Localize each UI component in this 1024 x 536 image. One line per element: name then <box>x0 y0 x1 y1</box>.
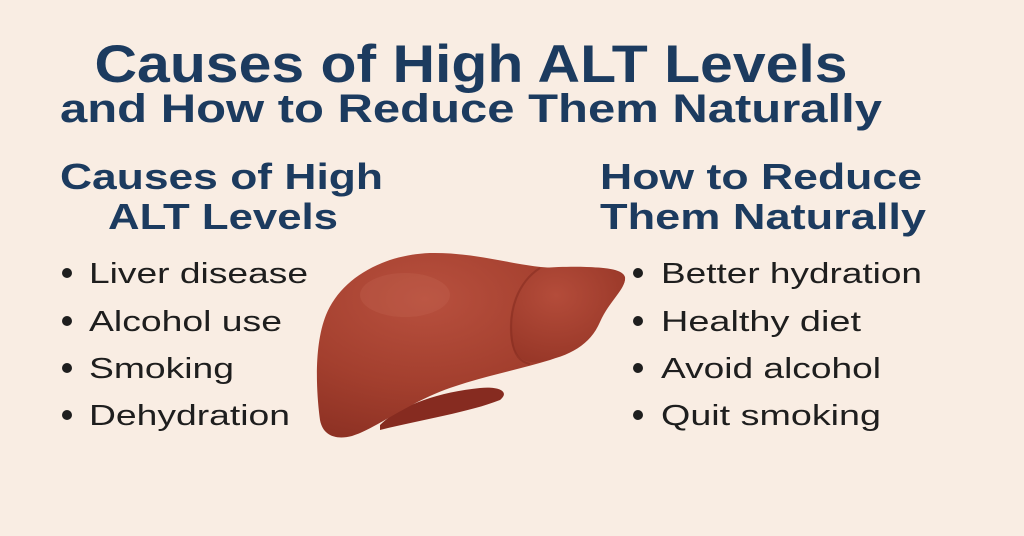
title <box>60 35 883 131</box>
heading: reduce <box>600 156 926 237</box>
list: causes: Alcohol use <box>89 306 282 338</box>
list: remedies <box>633 258 922 432</box>
list: remedies: Healthy diet <box>661 306 861 338</box>
list: causes: Liver disease <box>89 258 308 290</box>
heading: causes <box>60 156 383 237</box>
list: causes: Dehydration <box>89 400 290 432</box>
list: remedies: Better hydration <box>661 258 922 290</box>
heading: reduce: Them Naturally <box>600 196 926 237</box>
list: remedies: Avoid alcohol <box>661 353 881 385</box>
title: Causes of High ALT Levels <box>94 35 848 94</box>
title: and How to Reduce Them Naturally <box>60 87 883 131</box>
list: remedies: Quit smoking <box>661 400 881 432</box>
list: causes <box>62 258 308 432</box>
heading: reduce: How to Reduce <box>600 156 922 197</box>
heading: causes: ALT Levels <box>108 196 338 237</box>
icon: liver <box>317 253 625 437</box>
list: causes: Smoking <box>89 353 234 385</box>
heading: causes: Causes of High <box>60 156 383 197</box>
